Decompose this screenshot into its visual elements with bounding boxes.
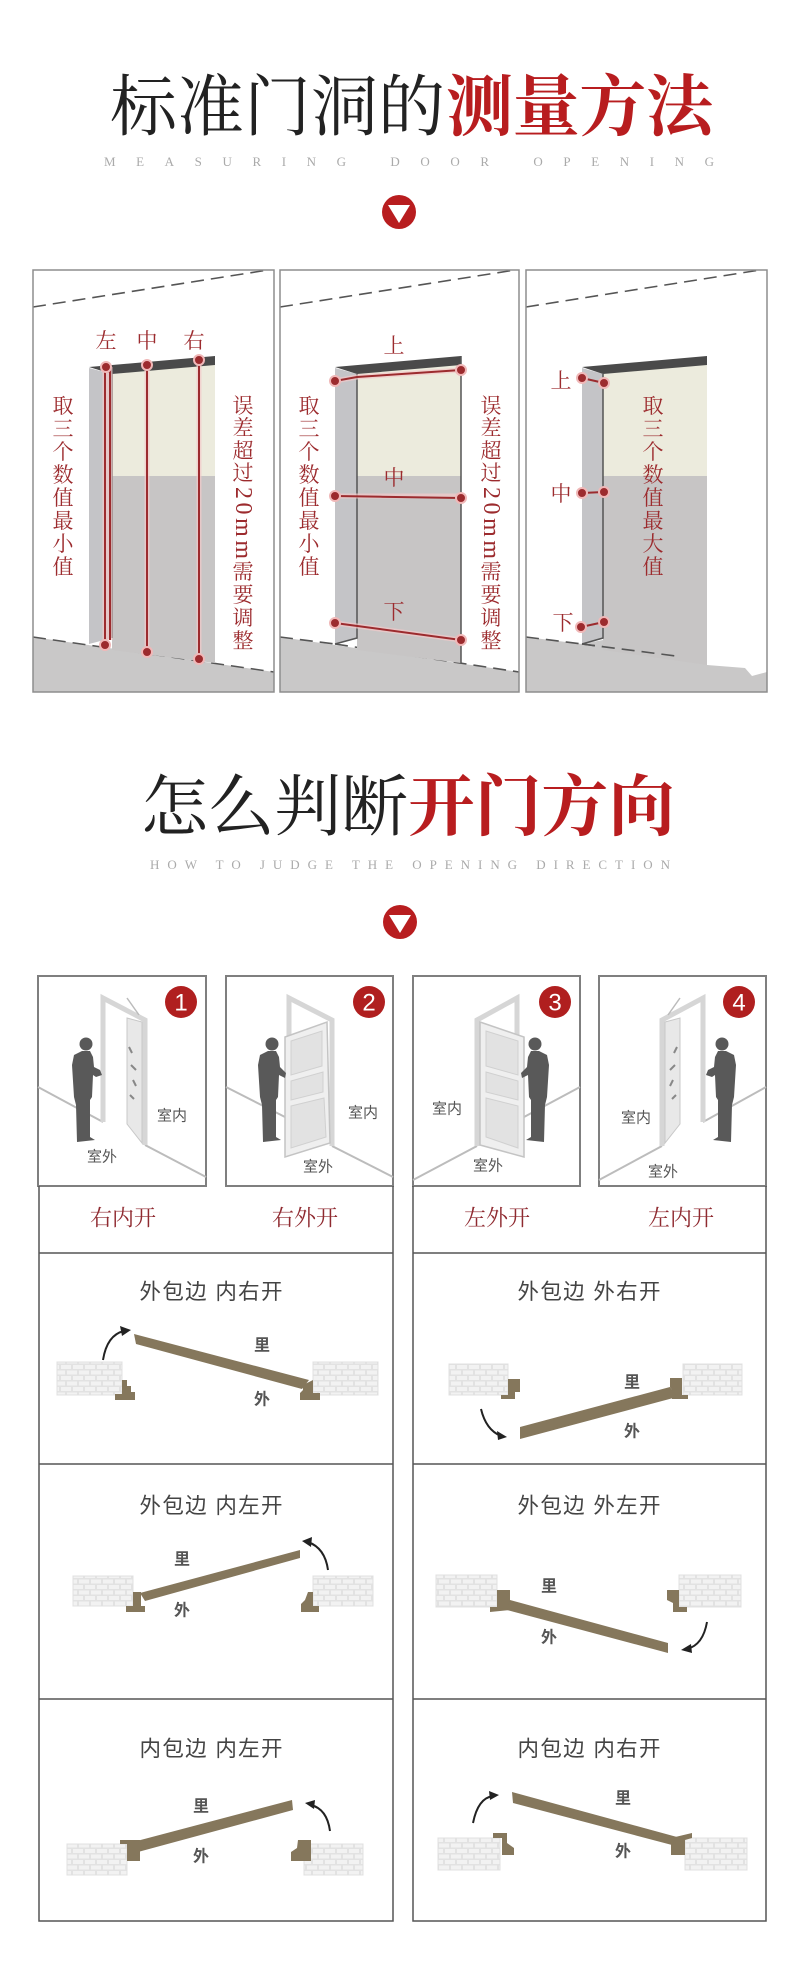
labels: top middle bottom xyxy=(384,334,404,624)
cell: outer casing, outward left xyxy=(436,1494,741,1653)
labels: left middle right xyxy=(96,329,204,353)
room labels xyxy=(87,1108,187,1166)
badge 4: 4 xyxy=(732,990,746,1016)
door type 3: left outward xyxy=(413,976,580,1186)
cell: inner casing, inward left: 内包边 内左开 xyxy=(140,1737,282,1761)
badge 3 xyxy=(539,986,571,1018)
labels: top middle bottom: 下 xyxy=(552,611,574,635)
door type 4: left inward xyxy=(599,976,766,1186)
cell: outer casing, outward right: 外包边 外右开 xyxy=(518,1280,660,1304)
table grid left xyxy=(39,1186,393,1921)
cell: outer casing, inward left: 外 xyxy=(174,1600,190,1620)
cell: inner casing, inward right xyxy=(438,1737,747,1870)
labels: left middle right: 左 xyxy=(96,329,116,353)
door type 1: right inward xyxy=(38,976,206,1186)
cell: outer casing, inward right xyxy=(57,1280,378,1408)
room labels: 室外 xyxy=(303,1158,333,1176)
room labels xyxy=(621,1110,678,1180)
table grid right xyxy=(413,1186,766,1921)
cell: outer casing, outward right: 里 xyxy=(624,1374,640,1392)
vertical note: error over 20mm needs adjusting: 误差超过 xyxy=(232,394,254,485)
door type names: 左内开 xyxy=(648,1206,714,1230)
vertical note: error over 20mm needs adjusting xyxy=(230,394,256,653)
cell: outer casing, outward right xyxy=(449,1280,742,1440)
title: measuring door opening: 标准门洞的 xyxy=(110,71,445,145)
red measure lines: left middle right xyxy=(100,355,204,664)
badge 2 xyxy=(353,986,385,1018)
cell: inner casing, inward right: 里 xyxy=(615,1790,631,1808)
labels: top middle bottom xyxy=(550,369,574,635)
cell: inner casing, inward right: 内包边 内右开 xyxy=(518,1737,660,1761)
badge 1 xyxy=(165,986,197,1018)
badge 2: 2 xyxy=(362,990,376,1016)
title: measuring door opening: 测量方法 xyxy=(446,71,718,145)
badge 4 xyxy=(723,986,755,1018)
cell: inner casing, inward left: 里 xyxy=(193,1798,209,1816)
cell: outer casing, inward left: 里 xyxy=(174,1552,190,1568)
person silhouette xyxy=(706,1038,736,1142)
vertical note: error over 20mm needs adjusting: 20mm xyxy=(230,487,256,559)
room labels: 室内 xyxy=(621,1110,651,1126)
person silhouette xyxy=(258,1038,286,1142)
cell: inner casing, inward right: 外 xyxy=(615,1842,631,1860)
room labels: 室内 xyxy=(157,1108,187,1124)
door type names: 右外开 xyxy=(272,1206,338,1230)
door type names: 右内开 xyxy=(90,1206,156,1230)
vertical note: error over 20mm needs adjusting: 误差超过 xyxy=(480,394,502,485)
door type names: 左外开 xyxy=(464,1206,530,1230)
room labels: 室外 xyxy=(473,1158,503,1174)
labels: top middle bottom: 下 xyxy=(384,600,404,624)
room labels: 室外 xyxy=(87,1148,117,1166)
title: measuring door opening xyxy=(110,71,718,145)
icon: red down triangle badge xyxy=(382,195,416,229)
cell: outer casing, inward right: 外 xyxy=(254,1390,270,1408)
vertical note: take the largest value: 取三个数值最大值 xyxy=(642,394,664,579)
cell: inner casing, inward left: 外 xyxy=(193,1846,209,1866)
vertical note: error over 20mm needs adjusting: 需要调整 xyxy=(232,560,254,653)
person silhouette xyxy=(521,1038,549,1142)
title: how to judge opening direction: 怎么判断 xyxy=(141,771,408,845)
vertical note: error over 20mm needs adjusting: 需要调整 xyxy=(480,560,502,653)
title: how to judge opening direction xyxy=(141,771,675,845)
labels: top middle bottom: 上 xyxy=(550,369,572,393)
labels: left middle right: 中 xyxy=(136,329,158,353)
cell: outer casing, inward right: 里 xyxy=(254,1338,270,1354)
room labels xyxy=(303,1104,378,1176)
cell: outer casing, outward right: 外 xyxy=(624,1422,640,1440)
badge 3: 3 xyxy=(548,990,562,1016)
labels: top middle bottom: 中 xyxy=(384,466,404,490)
subtitle: measuring door opening: MEASURING DOOR OPENING xyxy=(104,154,714,169)
vertical note: error over 20mm needs adjusting: 20mm xyxy=(478,487,504,559)
cell: outer casing, inward left xyxy=(73,1494,373,1620)
panel: measure width, left middle right xyxy=(33,270,274,692)
subtitle: how to judge the opening direction: HOW TO JUDGE THE OPENING DIRECTION xyxy=(150,857,671,872)
labels: top middle bottom: 中 xyxy=(550,482,572,506)
cell: inner casing, inward left xyxy=(67,1737,363,1875)
title: how to judge opening direction: 开门方向 xyxy=(408,771,675,845)
icon: red down triangle badge xyxy=(383,905,417,939)
labels: left middle right: 右 xyxy=(184,329,204,353)
cell: outer casing, outward left: 外包边 外左开 xyxy=(518,1494,660,1518)
badge 1: 1 xyxy=(174,990,188,1016)
room labels: 室内 xyxy=(432,1100,462,1118)
cell: outer casing, inward right: 外包边 内右开 xyxy=(140,1280,282,1304)
room labels: 室内 xyxy=(348,1104,378,1122)
vertical note: take the smallest value: 取三个数值最小值 xyxy=(52,394,74,579)
door type 2: right outward xyxy=(226,976,393,1186)
door type names xyxy=(90,1206,714,1230)
red measure lines: top middle bottom xyxy=(576,373,609,632)
cell: outer casing, inward left: 外包边 内左开 xyxy=(140,1494,282,1518)
room labels: 室外 xyxy=(648,1164,678,1180)
person silhouette xyxy=(72,1038,102,1142)
panel: measure height, top middle bottom xyxy=(280,270,519,692)
panel: measure wall depth xyxy=(526,270,767,692)
vertical note: error over 20mm needs adjusting xyxy=(478,394,504,653)
cell: outer casing, outward left: 外 xyxy=(541,1628,557,1646)
labels: top middle bottom: 上 xyxy=(384,334,404,358)
room labels xyxy=(432,1100,503,1174)
red measure lines: top middle bottom xyxy=(330,365,466,645)
vertical note: take the smallest value: 取三个数值最小值 xyxy=(298,394,320,579)
cell: outer casing, outward left: 里 xyxy=(541,1578,557,1596)
